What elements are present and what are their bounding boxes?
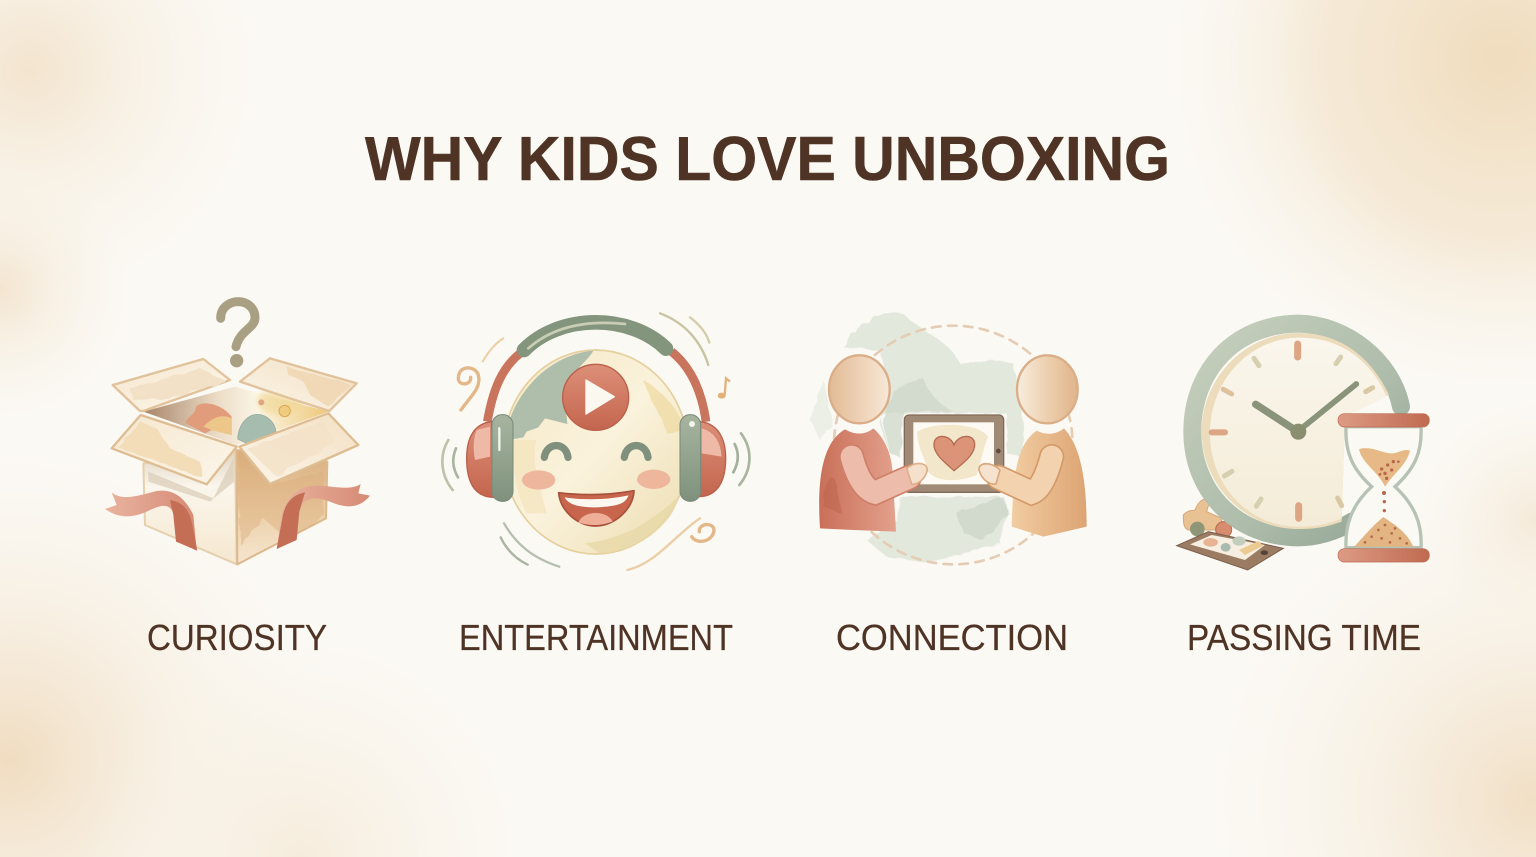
face (503, 350, 688, 554)
cheeks (522, 470, 555, 490)
green wash (810, 313, 1023, 563)
box right face (237, 450, 327, 564)
clock rim (1192, 324, 1401, 537)
title: WHY KIDS LOVE UNBOXING (365, 125, 1170, 194)
ribbon left (105, 491, 197, 551)
front flaps (112, 415, 237, 484)
left ear cup (467, 415, 513, 501)
label: connection: CONNECTION (836, 617, 1068, 658)
music note (718, 378, 730, 399)
body (1012, 428, 1087, 537)
head (829, 355, 890, 423)
question mark (221, 302, 255, 367)
label: entertainment: ENTERTAINMENT (459, 617, 733, 658)
icon: two people sharing a tablet (810, 313, 1087, 564)
arm (998, 457, 1052, 493)
back flaps (113, 359, 230, 411)
headband (487, 322, 706, 422)
right ear cup (680, 415, 726, 501)
play button (563, 364, 629, 430)
right person (979, 355, 1087, 537)
tablet (904, 415, 1004, 492)
dashed circle (834, 326, 1073, 564)
tablet toy (1177, 532, 1283, 570)
icon: smiling face with headphones (442, 313, 749, 570)
left person (819, 355, 927, 532)
toys in the box (186, 388, 303, 443)
box left face (143, 450, 237, 564)
box inside (143, 387, 328, 445)
arm (852, 457, 909, 493)
sound waves (442, 313, 749, 570)
toy car (1183, 499, 1232, 538)
clock hands (1256, 384, 1356, 440)
mouth (559, 491, 634, 526)
ribbon right (277, 484, 370, 549)
head (1017, 355, 1078, 423)
eyes (544, 446, 568, 457)
icon: clock, hourglass and toys (1177, 324, 1429, 570)
tick marks (1212, 344, 1373, 518)
heart (934, 436, 975, 471)
clock face (1202, 333, 1389, 529)
label: curiosity: CURIOSITY (147, 617, 327, 658)
icon: open box with question mark (105, 302, 370, 564)
body (819, 428, 896, 532)
label: passing time: PASSING TIME (1187, 617, 1421, 658)
hourglass (1338, 414, 1429, 562)
